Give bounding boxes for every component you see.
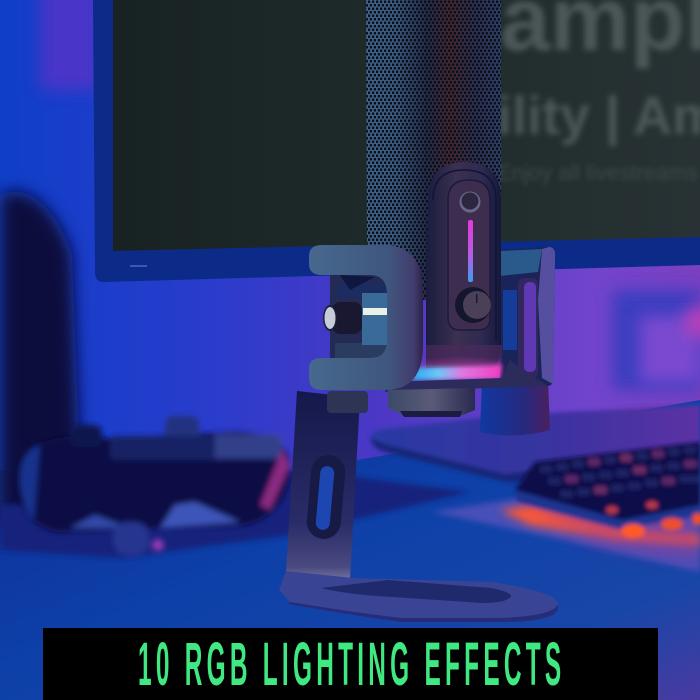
- microphone body: [366, 0, 501, 300]
- blurred on-screen text: Enjoy all livestreams: [497, 160, 698, 185]
- monitor stand base: [370, 405, 700, 482]
- keyboard: [500, 442, 700, 560]
- left mouse mat: [0, 470, 470, 558]
- mute button: [460, 192, 480, 212]
- gain knob: [455, 287, 491, 323]
- red underglow: [500, 505, 700, 545]
- gamepad: [18, 416, 290, 556]
- shock mount internals: [323, 270, 400, 365]
- mic right bracket: [500, 247, 555, 386]
- white indicator: [363, 308, 387, 315]
- blurred on-screen text: [497, 0, 700, 185]
- stand collar: [327, 391, 368, 413]
- dark blurred object at left: [0, 191, 82, 525]
- caption text: 10 RGB LIGHTING EFFECTS: [138, 630, 561, 698]
- red key glows: [621, 524, 645, 538]
- side knob: [323, 302, 362, 334]
- C-shaped clamp: [309, 245, 423, 390]
- monitor screen: [113, 0, 700, 251]
- desk surface: [0, 400, 700, 700]
- stand foot: [279, 571, 558, 622]
- right desk mat: [432, 498, 700, 572]
- RGB light ring: [385, 359, 548, 392]
- LED light bar: [468, 220, 473, 282]
- monitor stand neck: [480, 380, 550, 436]
- mic control panel: [426, 162, 502, 368]
- threaded mount ring: [388, 388, 475, 417]
- monitor: [93, 0, 700, 282]
- stand arm: [286, 391, 360, 580]
- arm slot: [305, 454, 347, 540]
- bottom caption bar: [43, 628, 658, 700]
